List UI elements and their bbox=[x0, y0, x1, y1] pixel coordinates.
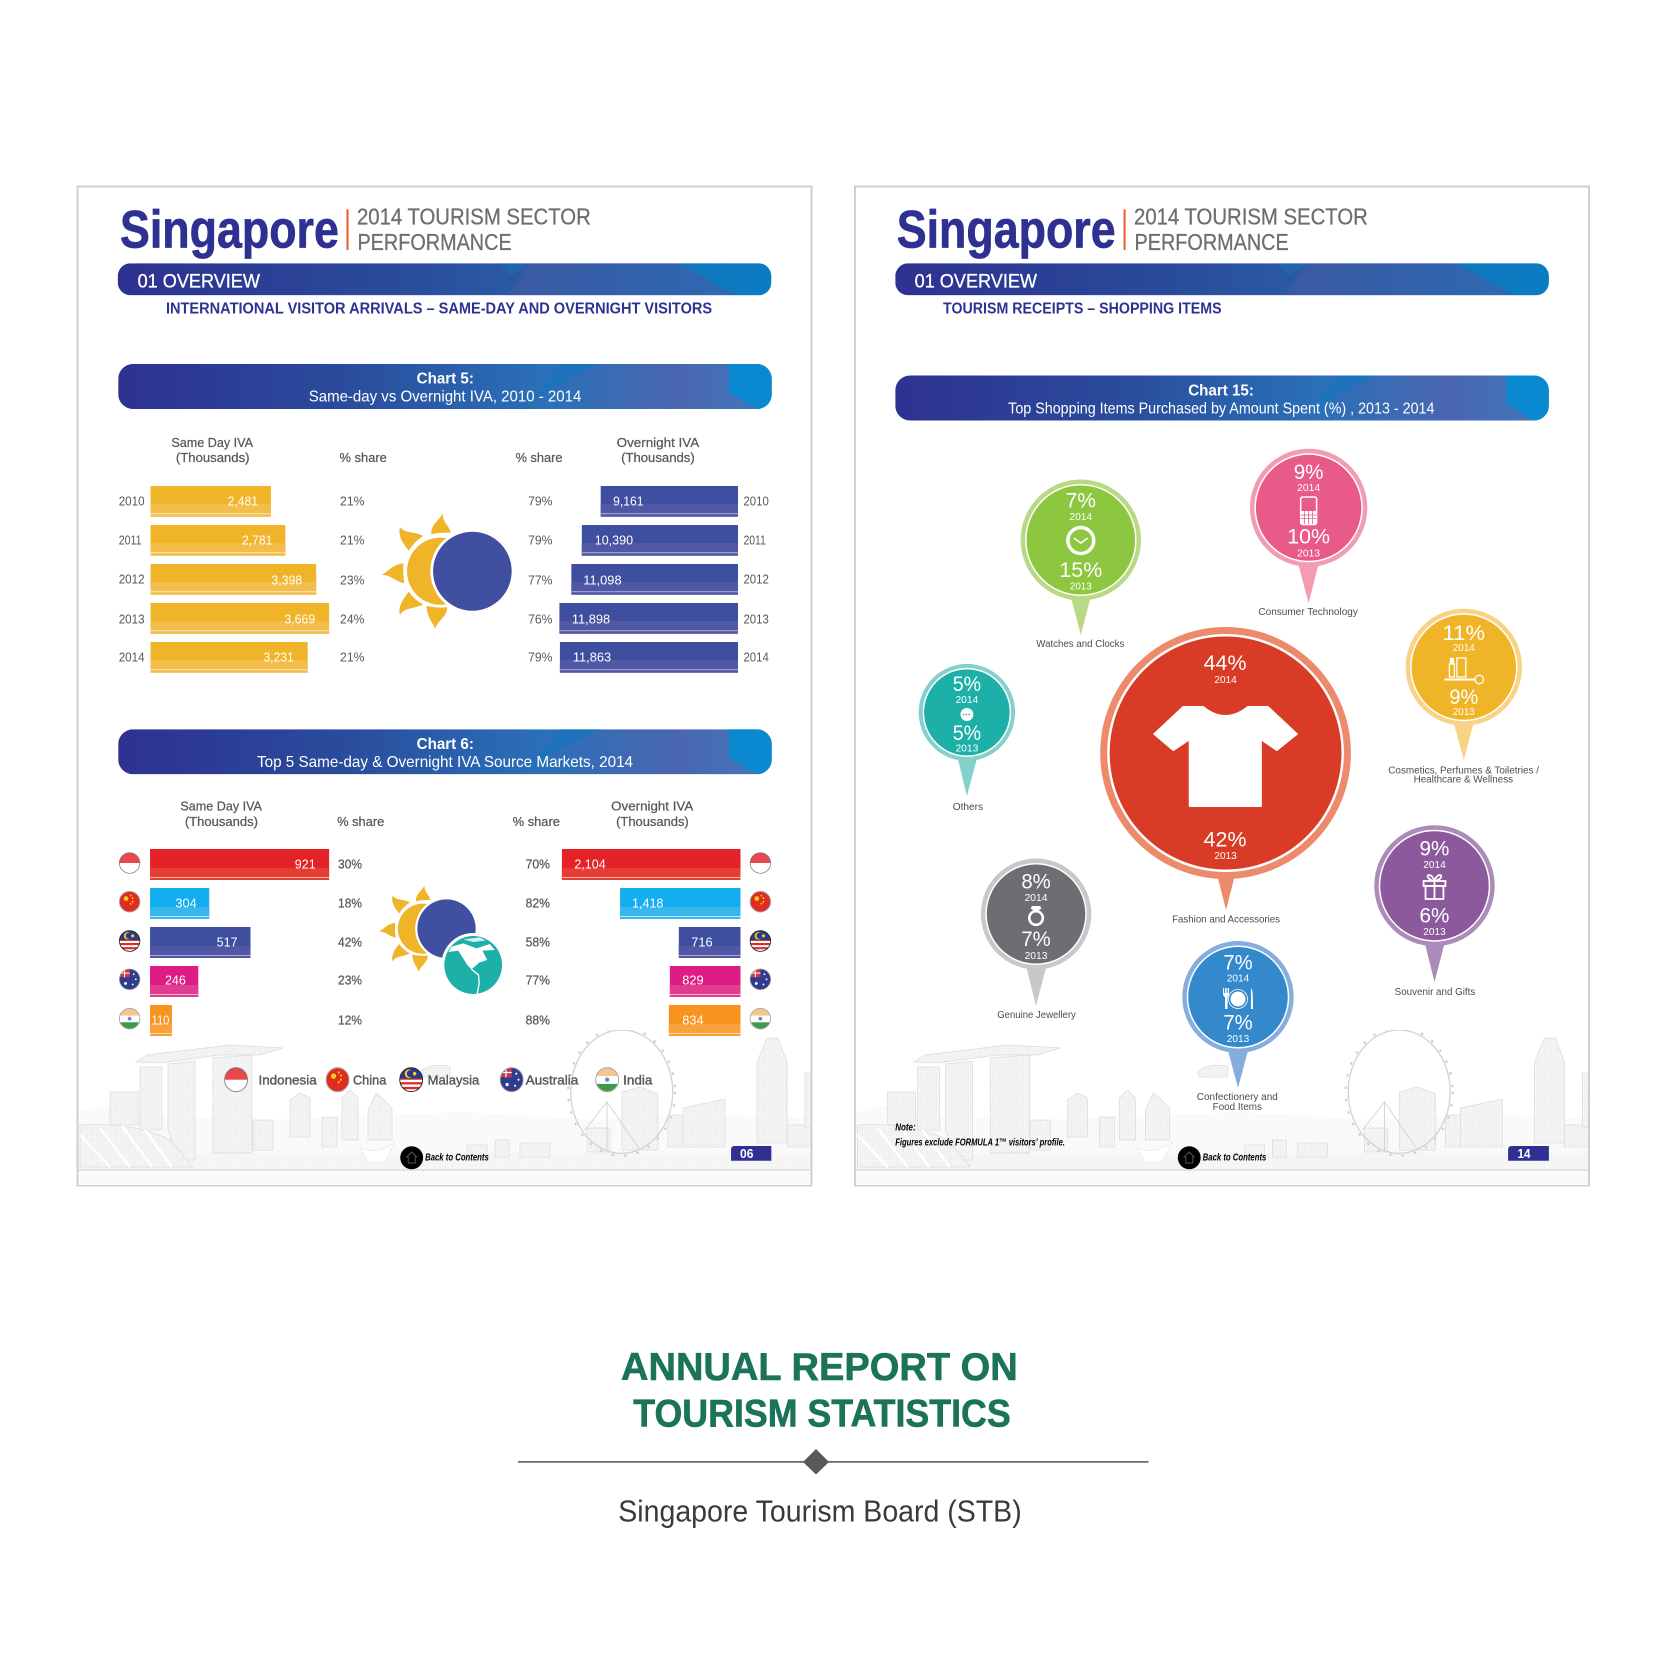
panel: report page 06 bbox=[78, 186, 812, 1186]
chart 5 right bars: overnight IVA: 2013 bbox=[743, 611, 769, 627]
subtitle: source: Singapore Tourism Board (STB) bbox=[618, 1494, 1022, 1529]
chart 6 right bars: overnight by market: 834 bbox=[682, 1012, 704, 1027]
page heading: PERFORMANCE bbox=[357, 229, 512, 255]
icon: gift box bbox=[1424, 875, 1445, 899]
chart 6 left bars: same day by market: 12% bbox=[338, 1012, 362, 1027]
chart 6 right bars: overnight by market bbox=[526, 849, 771, 1036]
chart 6 title bar bbox=[118, 729, 772, 774]
chart 6 right bars: overnight by market: 2,104 bbox=[574, 856, 606, 871]
chart 5 column headers: Same Day IVA bbox=[171, 436, 254, 450]
chart 5 left bars: same day IVA: 21% bbox=[340, 494, 365, 509]
legend: source markets: China bbox=[353, 1072, 387, 1087]
page number 06 bbox=[731, 1146, 771, 1161]
back to contents link bbox=[400, 1146, 489, 1169]
chart 5 left bars: same day IVA: 3,669 bbox=[284, 611, 315, 627]
chart 5 title bar: Same-day vs Overnight IVA, 2010 - 2014 bbox=[309, 388, 581, 405]
pin: genuine jewellery: 7% bbox=[1021, 928, 1051, 951]
subheading: INTERNATIONAL VISITOR ARRIVALS – SAME-DAY AND OVERNIGHT VISITORS bbox=[166, 300, 712, 317]
chart 6 left bars: same day by market: 23% bbox=[338, 972, 362, 987]
pin: fashion and accessories: 44% bbox=[1204, 652, 1246, 675]
pin: souvenir and gifts: 2014 bbox=[1423, 860, 1446, 871]
chart 5 right bars: overnight IVA: 79% bbox=[528, 650, 553, 665]
chart 6 left bars: same day by market: 18% bbox=[338, 895, 362, 910]
chart 6 left bars: same day by market: 304 bbox=[175, 895, 197, 910]
chart 6 title bar: Top 5 Same-day & Overnight IVA Source Markets, 2014 bbox=[257, 754, 633, 771]
page number 14: 14 bbox=[1518, 1147, 1531, 1161]
pin: cosmetics, perfumes and toiletries bbox=[1388, 609, 1539, 786]
pin: cosmetics, perfumes and toiletries: 2013 bbox=[1453, 707, 1475, 718]
chart 5 left bars: same day IVA: 2014 bbox=[119, 650, 145, 665]
chart 6 right bars: overnight by market: 1,418 bbox=[632, 895, 663, 910]
pin: fashion and accessories: 2013 bbox=[1214, 851, 1237, 862]
chart 6 right bars: overnight by market: 70% bbox=[526, 856, 550, 871]
chart 6 right bars: overnight by market: 77% bbox=[526, 972, 550, 987]
skyline illustration bbox=[78, 1028, 812, 1186]
pin: souvenir and gifts: 2013 bbox=[1423, 927, 1446, 938]
chart 5 left bars: same day IVA: 2012 bbox=[119, 571, 145, 587]
chart 6 column headers: Same Day IVA bbox=[180, 800, 263, 814]
note: Note: bbox=[895, 1123, 916, 1134]
pin: others bbox=[919, 664, 1015, 813]
chart 5 right bars: overnight IVA: 79% bbox=[528, 494, 553, 509]
pin: fashion and accessories: 42% bbox=[1204, 829, 1246, 852]
icon: sun and moon (day and overnight) bbox=[382, 513, 514, 629]
note bbox=[895, 1123, 1065, 1148]
icon: sun, moon and globe bbox=[379, 885, 505, 997]
chart 6 right bars: overnight by market: 716 bbox=[691, 934, 713, 949]
chart 6 right bars: overnight by market: 88% bbox=[526, 1012, 550, 1027]
back to contents link: Back to Contents bbox=[425, 1153, 489, 1164]
pin: souvenir and gifts: 6% bbox=[1420, 904, 1449, 927]
icon: mobile phone bbox=[1301, 497, 1317, 524]
pin: confectionery and food items: 2013 bbox=[1227, 1034, 1249, 1045]
chart 5 right bars: overnight IVA: 76% bbox=[528, 611, 553, 627]
pin: watches and clocks: 2014 bbox=[1069, 512, 1092, 523]
pin: genuine jewellery: 8% bbox=[1021, 870, 1051, 893]
chart 5 right bars: overnight IVA: 2010 bbox=[743, 494, 769, 509]
chart 5 right bars: overnight IVA bbox=[528, 486, 769, 673]
chart 6 column headers bbox=[180, 800, 694, 829]
pin: genuine jewellery: 2013 bbox=[1025, 951, 1048, 962]
chart 5 left bars: same day IVA: 23% bbox=[340, 573, 365, 588]
legend: source markets: Malaysia bbox=[428, 1072, 480, 1087]
title divider with diamond bbox=[518, 1449, 1148, 1474]
pin: genuine jewellery bbox=[981, 858, 1091, 1021]
page heading bbox=[120, 201, 591, 260]
section bar: 01 overview: 01 OVERVIEW bbox=[138, 271, 260, 292]
chart 5 right bars: overnight IVA: 9,161 bbox=[613, 494, 643, 509]
pin: confectionery and food items bbox=[1182, 941, 1294, 1113]
pin: souvenir and gifts: Souvenir and Gifts bbox=[1395, 987, 1475, 998]
pin: watches and clocks: 2013 bbox=[1070, 581, 1092, 592]
chart 6 right bars: overnight by market: 58% bbox=[526, 934, 550, 949]
page heading: Singapore bbox=[120, 201, 339, 260]
chart 6 left bars: same day by market: 246 bbox=[165, 972, 186, 987]
pin: confectionery and food items: 2014 bbox=[1227, 974, 1249, 985]
pin: watches and clocks: 7% bbox=[1066, 489, 1096, 513]
pin: others: 2014 bbox=[955, 695, 979, 706]
icon: cosmetics bbox=[1444, 658, 1484, 684]
pin: confectionery and food items: 7% bbox=[1223, 951, 1253, 974]
chart 6 title bar: Chart 6: bbox=[417, 736, 474, 753]
page 06 content bbox=[118, 201, 772, 1169]
chart 6 column headers: % share bbox=[513, 815, 560, 829]
chart 5 right bars: overnight IVA: 11,098 bbox=[583, 573, 622, 588]
page number 06: 06 bbox=[740, 1147, 753, 1161]
chart 5 left bars: same day IVA bbox=[119, 486, 365, 673]
chart 5 title bar bbox=[118, 364, 772, 409]
icon: clock bbox=[1068, 528, 1094, 554]
chart 6 right bars: overnight by market: 82% bbox=[526, 895, 550, 910]
chart 6 column headers: (Thousands) bbox=[185, 815, 258, 829]
chart 5 right bars: overnight IVA: 2011 bbox=[743, 533, 766, 548]
legend: source markets: Indonesia bbox=[258, 1072, 317, 1087]
chart 5 right bars: overnight IVA: 2012 bbox=[743, 571, 769, 587]
chart 6 column headers: (Thousands) bbox=[616, 815, 689, 829]
pin: fashion and accessories bbox=[1100, 627, 1351, 926]
chart 5 column headers: % share bbox=[340, 451, 387, 465]
chart 6 column headers: % share bbox=[337, 815, 384, 829]
page heading: 2014 TOURISM SECTOR bbox=[1134, 203, 1368, 230]
pin: fashion and accessories: 2014 bbox=[1214, 675, 1237, 686]
chart 5 right bars: overnight IVA: 77% bbox=[528, 573, 553, 588]
icon: diamond ring bbox=[1029, 906, 1043, 925]
icon: more dots bbox=[960, 708, 973, 721]
pin: others: 2013 bbox=[955, 743, 979, 754]
main title: TOURISM STATISTICS bbox=[633, 1393, 1011, 1436]
back to contents link: Back to Contents bbox=[1203, 1153, 1267, 1164]
chart 6 left bars: same day by market: 517 bbox=[217, 934, 238, 949]
section bar: 01 overview: 01 OVERVIEW bbox=[915, 271, 1037, 292]
section bar: 01 overview bbox=[118, 263, 771, 295]
pin: souvenir and gifts: 9% bbox=[1420, 838, 1449, 861]
pin: confectionery and food items: Food Items bbox=[1213, 1102, 1262, 1113]
chart 15 title bar: Chart 15: bbox=[1188, 382, 1254, 400]
legend: source markets bbox=[225, 1066, 653, 1092]
chart 6 left bars: same day by market bbox=[119, 849, 362, 1036]
chart 15 title bar: Top Shopping Items Purchased by Amount Spent (%) , 2013 - 2014 bbox=[1008, 400, 1435, 418]
pin: confectionery and food items: 7% bbox=[1223, 1011, 1253, 1034]
legend: source markets: Australia bbox=[526, 1072, 579, 1087]
page 14 content bbox=[895, 201, 1549, 1169]
pin: consumer technology: 2014 bbox=[1297, 483, 1320, 494]
skyline illustration bbox=[856, 1028, 1590, 1186]
icon: plate and cutlery bbox=[1223, 988, 1253, 1009]
chart 5 column headers: Overnight IVA bbox=[617, 436, 700, 450]
chart 6 right bars: overnight by market: 829 bbox=[682, 972, 704, 987]
panel: report page 14 bbox=[855, 186, 1590, 1186]
page heading: Singapore bbox=[897, 201, 1116, 260]
pin: others: Others bbox=[953, 802, 983, 813]
pin: cosmetics, perfumes and toiletries: Cosmetics, Perfumes & Toiletries / bbox=[1388, 766, 1539, 777]
pin: consumer technology: 10% bbox=[1287, 526, 1330, 549]
pin: watches and clocks: 15% bbox=[1059, 559, 1102, 582]
chart 15 title bar bbox=[895, 376, 1549, 420]
chart 5 right bars: overnight IVA: 11,863 bbox=[573, 650, 611, 665]
page heading bbox=[897, 201, 1368, 260]
pin: cosmetics, perfumes and toiletries: 2014 bbox=[1453, 643, 1475, 654]
chart 5 left bars: same day IVA: 2010 bbox=[119, 494, 145, 509]
chart 5 column headers bbox=[171, 436, 700, 465]
back to contents link bbox=[1178, 1146, 1267, 1169]
chart 6 left bars: same day by market: 42% bbox=[338, 934, 362, 949]
chart 6 column headers: Overnight IVA bbox=[611, 800, 694, 814]
chart 6 left bars: same day by market: 110 bbox=[152, 1012, 169, 1027]
pin: souvenir and gifts bbox=[1374, 825, 1495, 998]
subheading: TOURISM RECEIPTS – SHOPPING ITEMS bbox=[943, 300, 1222, 317]
chart 5 left bars: same day IVA: 2011 bbox=[119, 533, 142, 548]
pin: others: 5% bbox=[953, 673, 981, 696]
pin: others: 5% bbox=[953, 722, 981, 745]
chart 5 column headers: % share bbox=[516, 451, 562, 465]
chart 5 right bars: overnight IVA: 79% bbox=[528, 533, 553, 548]
page heading: 2014 TOURISM SECTOR bbox=[357, 203, 591, 230]
icon: t-shirt bbox=[1154, 707, 1297, 806]
page heading: PERFORMANCE bbox=[1135, 229, 1289, 255]
chart 6 left bars: same day by market: 921 bbox=[295, 856, 316, 871]
pin: watches and clocks: Watches and Clocks bbox=[1036, 639, 1124, 650]
chart 5 right bars: overnight IVA: 11,898 bbox=[572, 611, 610, 627]
page number 14 bbox=[1508, 1146, 1549, 1161]
note: Figures exclude FORMULA 1™ visitors’ profile. bbox=[895, 1137, 1065, 1148]
pin: consumer technology: Consumer Technology bbox=[1258, 607, 1359, 618]
chart 5 left bars: same day IVA: 2,781 bbox=[242, 533, 272, 548]
pin: cosmetics, perfumes and toiletries: 11% bbox=[1443, 622, 1485, 645]
globe bbox=[441, 933, 505, 997]
pin: cosmetics, perfumes and toiletries: Healthcare & Wellness bbox=[1414, 775, 1513, 786]
chart 5 right bars: overnight IVA: 10,390 bbox=[595, 533, 633, 548]
section bar: 01 overview bbox=[895, 263, 1549, 295]
pin: consumer technology bbox=[1250, 449, 1367, 618]
pin: watches and clocks bbox=[1021, 480, 1141, 650]
pin: genuine jewellery: 2014 bbox=[1025, 893, 1048, 904]
chart 5 left bars: same day IVA: 24% bbox=[340, 611, 365, 627]
chart 5 column headers: (Thousands) bbox=[621, 451, 695, 465]
pin: confectionery and food items: Confectionery and bbox=[1197, 1092, 1278, 1103]
pin: fashion and accessories: Fashion and Accessories bbox=[1172, 915, 1280, 926]
main title bbox=[621, 1346, 1018, 1436]
pin: consumer technology: 9% bbox=[1294, 461, 1324, 484]
legend: source markets: India bbox=[623, 1072, 653, 1087]
chart 5 right bars: overnight IVA: 2014 bbox=[743, 650, 769, 665]
chart 5 left bars: same day IVA: 3,398 bbox=[271, 573, 302, 588]
chart 5 left bars: same day IVA: 2,481 bbox=[228, 494, 258, 509]
chart 5 left bars: same day IVA: 21% bbox=[340, 650, 365, 665]
main title: ANNUAL REPORT ON bbox=[621, 1346, 1018, 1389]
chart 5 left bars: same day IVA: 21% bbox=[340, 533, 365, 548]
chart 5 left bars: same day IVA: 3,231 bbox=[263, 650, 294, 665]
pin: consumer technology: 2013 bbox=[1297, 548, 1320, 559]
chart 5 column headers: (Thousands) bbox=[176, 451, 250, 465]
chart 5 title bar: Chart 5: bbox=[417, 370, 474, 388]
pin: cosmetics, perfumes and toiletries: 9% bbox=[1449, 686, 1478, 709]
chart 6 left bars: same day by market: 30% bbox=[338, 856, 362, 871]
pin: genuine jewellery: Genuine Jewellery bbox=[997, 1010, 1077, 1021]
chart 5 left bars: same day IVA: 2013 bbox=[119, 611, 145, 627]
